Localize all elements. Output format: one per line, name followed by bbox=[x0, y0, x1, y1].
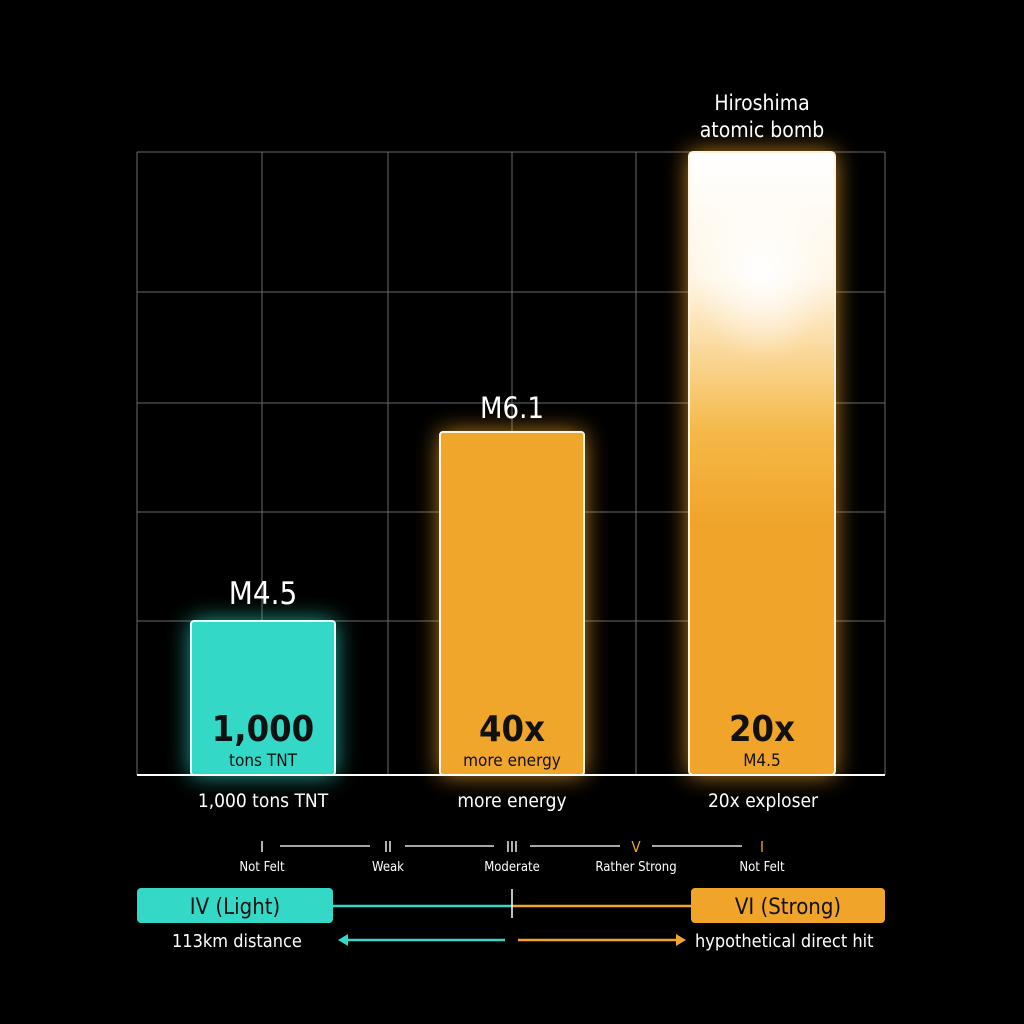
intensity comparison: hypothetical direct hit bbox=[695, 931, 873, 952]
bar: M6.1 bbox=[440, 391, 584, 775]
chart grid bbox=[137, 152, 885, 775]
intensity comparison: 113km distance bbox=[172, 931, 302, 952]
intensity comparison bbox=[137, 888, 885, 952]
intensity scale: Moderate bbox=[484, 860, 540, 875]
bar: Hiroshima: atomic bomb bbox=[700, 118, 824, 142]
axis labels bbox=[198, 790, 819, 812]
bar: M4.5: 1,000 bbox=[212, 709, 314, 750]
axis labels: 20x exploser bbox=[708, 790, 819, 812]
bar: Hiroshima: 20x bbox=[729, 709, 795, 750]
intensity scale: V bbox=[631, 838, 641, 856]
intensity scale: III bbox=[506, 838, 518, 856]
intensity comparison: IV (Light) bbox=[190, 895, 280, 920]
intensity scale: Not Felt bbox=[739, 860, 785, 875]
bar: M6.1: M6.1 bbox=[480, 391, 544, 425]
bar: M6.1: 40x bbox=[479, 709, 545, 750]
axis labels: more energy bbox=[457, 790, 567, 812]
intensity comparison: VI (Strong) bbox=[735, 895, 841, 920]
intensity scale bbox=[239, 838, 785, 875]
intensity scale: Rather Strong bbox=[595, 860, 677, 875]
intensity scale: I bbox=[260, 838, 264, 856]
bar: Hiroshima bbox=[689, 91, 835, 775]
intensity scale: Weak bbox=[372, 860, 404, 875]
axis labels: 1,000 tons TNT bbox=[198, 790, 329, 812]
bar: Hiroshima: M4.5 bbox=[743, 751, 781, 771]
bar: M4.5 bbox=[191, 576, 335, 775]
bar: M4.5: M4.5 bbox=[229, 576, 297, 612]
bar: Hiroshima: Hiroshima bbox=[714, 91, 810, 115]
intensity scale: II bbox=[384, 838, 392, 856]
intensity scale: I bbox=[760, 838, 764, 856]
intensity scale: Not Felt bbox=[239, 860, 285, 875]
baseline bbox=[137, 774, 885, 776]
bar: M4.5: tons TNT bbox=[229, 751, 298, 771]
bar: M6.1: more energy bbox=[463, 751, 561, 771]
